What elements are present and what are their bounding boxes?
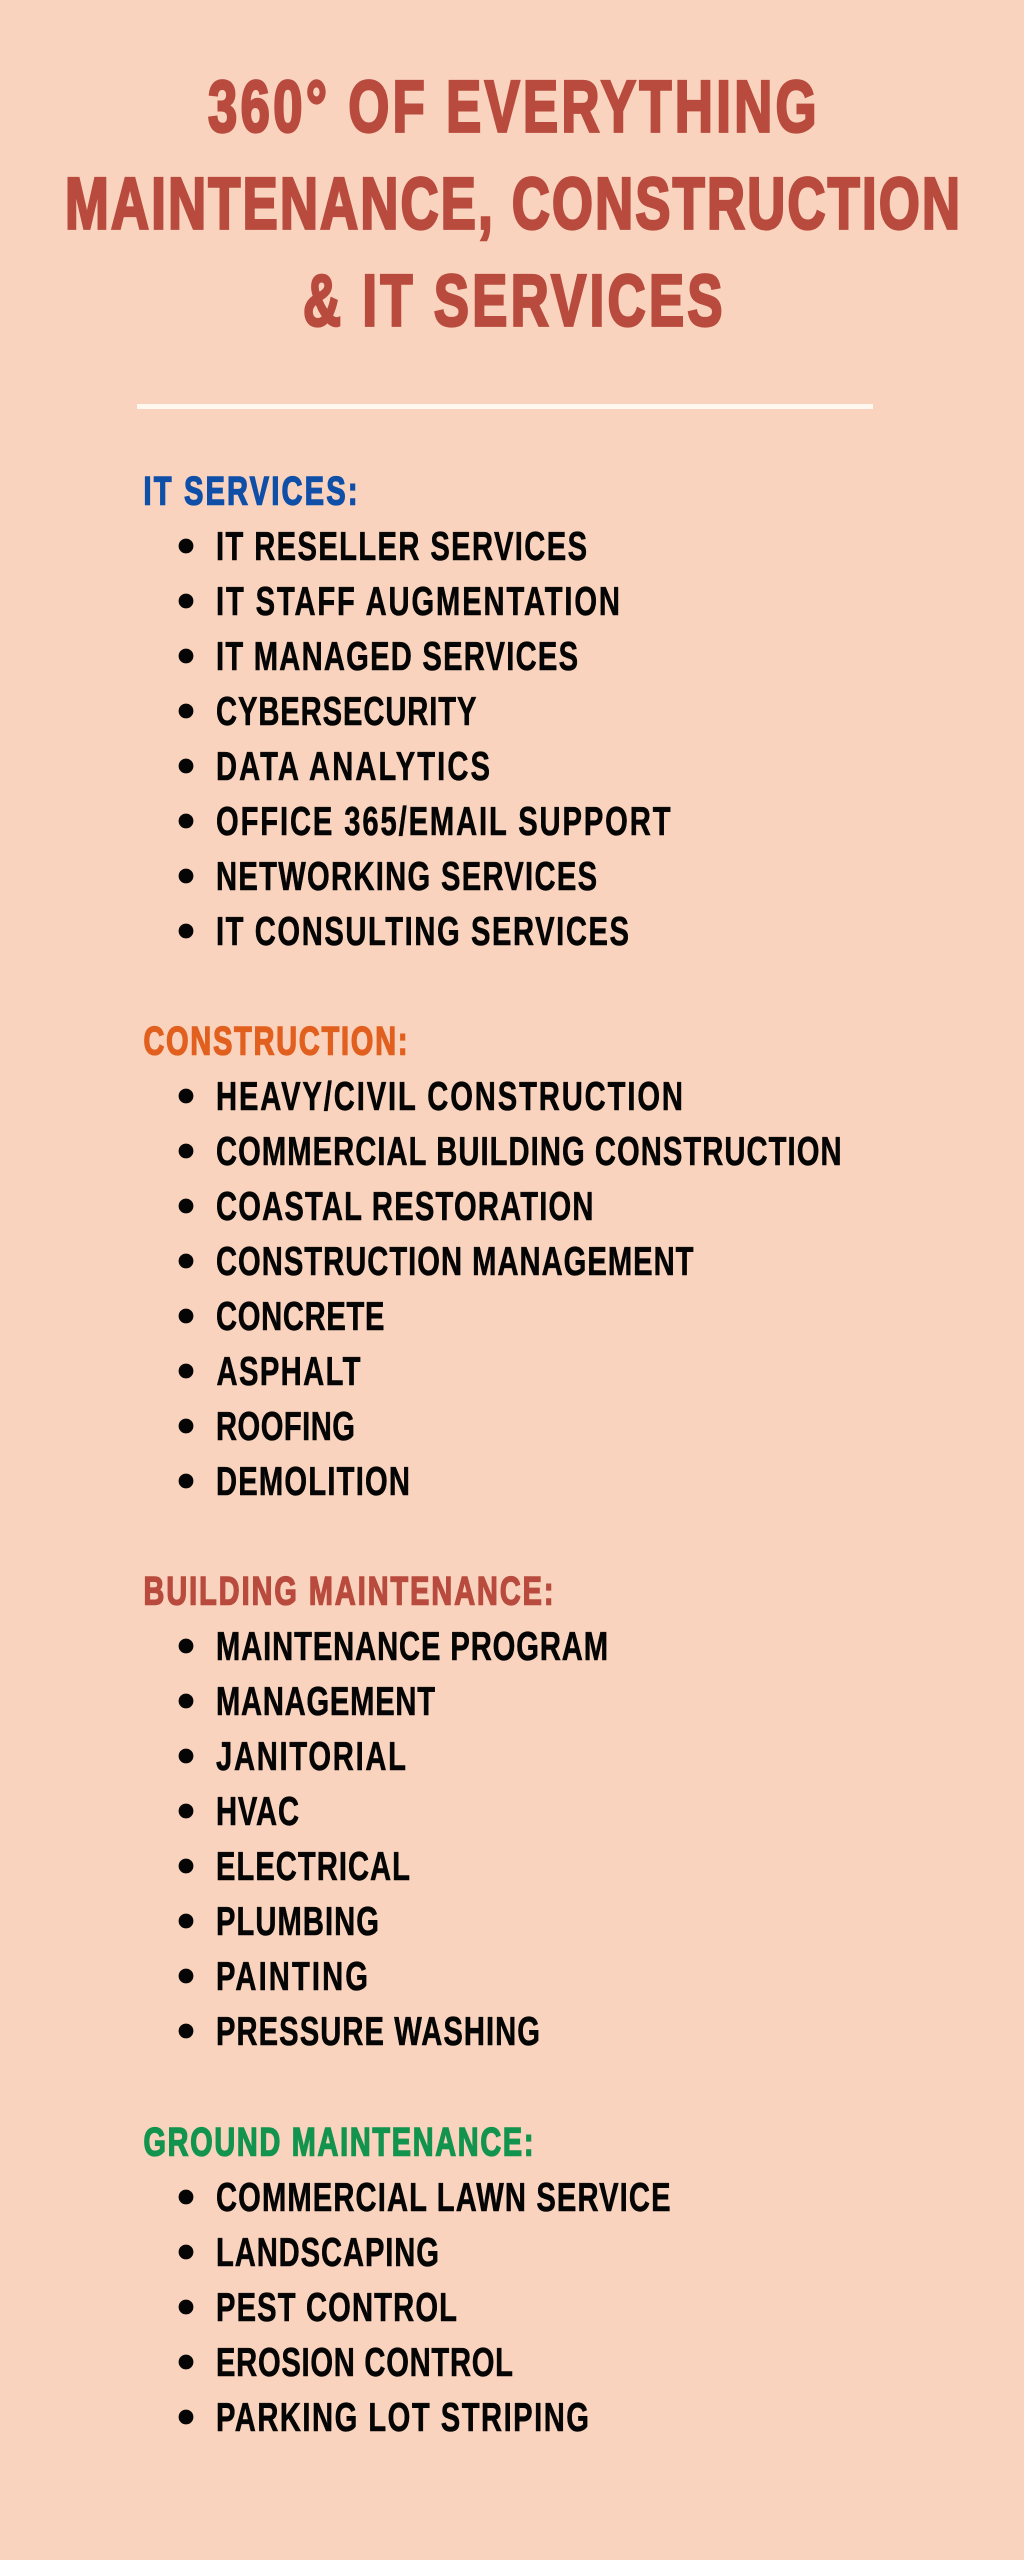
item: Office 365 / email support: OFFICE 365/EMAIL SUPPORT	[216, 798, 671, 844]
item: IT reseller services: IT RESELLER SERVICES	[216, 523, 587, 569]
title: MAINTENANCE, CONSTRUCTION	[65, 164, 960, 245]
item: painting: PAINTING	[216, 1953, 368, 1999]
item: data analytics: DATA ANALYTICS	[216, 743, 490, 789]
item: IT consulting services: IT CONSULTING SERVICES	[216, 908, 629, 954]
heading: building maintenance: BUILDING MAINTENANCE:	[144, 1570, 553, 1614]
title	[65, 67, 960, 342]
item: maintenance program: MAINTENANCE PROGRAM	[216, 1623, 608, 1669]
item: concrete: CONCRETE	[216, 1293, 384, 1339]
item: plumbing: PLUMBING	[216, 1898, 379, 1944]
item: networking services: NETWORKING SERVICES	[216, 853, 597, 899]
item: management: MANAGEMENT	[216, 1678, 435, 1724]
item: HVAC: HVAC	[216, 1788, 299, 1834]
heading: construction: CONSTRUCTION:	[144, 1020, 407, 1064]
heading: ground maintenance: GROUND MAINTENANCE:	[144, 2120, 533, 2164]
title divider	[137, 404, 873, 409]
item: HVAC	[179, 1788, 299, 1834]
item: demolition: DEMOLITION	[216, 1458, 410, 1504]
panel: ground maintenance	[144, 2120, 671, 2440]
panel: building maintenance	[144, 1570, 608, 2054]
heading: IT services: IT SERVICES:	[144, 470, 357, 514]
item: electrical: ELECTRICAL	[216, 1843, 410, 1889]
item: heavy/civil construction: HEAVY/CIVIL CONSTRUCTION	[216, 1073, 683, 1119]
item: commercial building construction: COMMERCIAL BUILDING CONSTRUCTION	[216, 1128, 842, 1174]
title: & IT SERVICES	[303, 261, 722, 342]
item: commercial lawn service: COMMERCIAL LAWN SERVICE	[216, 2174, 671, 2220]
item: erosion control: EROSION CONTROL	[216, 2339, 513, 2385]
item: coastal restoration: COASTAL RESTORATION	[216, 1183, 593, 1229]
item: cybersecurity: CYBERSECURITY	[216, 688, 476, 734]
title: 360° OF EVERYTHING	[208, 67, 816, 148]
item: pressure washing: PRESSURE WASHING	[216, 2008, 540, 2054]
item: IT staff augmentation: IT STAFF AUGMENTATION	[216, 578, 620, 624]
item: parking lot striping: PARKING LOT STRIPING	[216, 2394, 589, 2440]
item: landscaping: LANDSCAPING	[216, 2229, 439, 2275]
panel: construction	[144, 1020, 842, 1504]
item: janitorial: JANITORIAL	[216, 1733, 406, 1779]
item: construction management: CONSTRUCTION MANAGEMENT	[216, 1238, 694, 1284]
item: pest control: PEST CONTROL	[216, 2284, 457, 2330]
item: IT managed services: IT MANAGED SERVICES	[216, 633, 578, 679]
panel: IT services	[144, 470, 671, 954]
item: asphalt: ASPHALT	[216, 1348, 361, 1394]
item: roofing: ROOFING	[216, 1403, 355, 1449]
